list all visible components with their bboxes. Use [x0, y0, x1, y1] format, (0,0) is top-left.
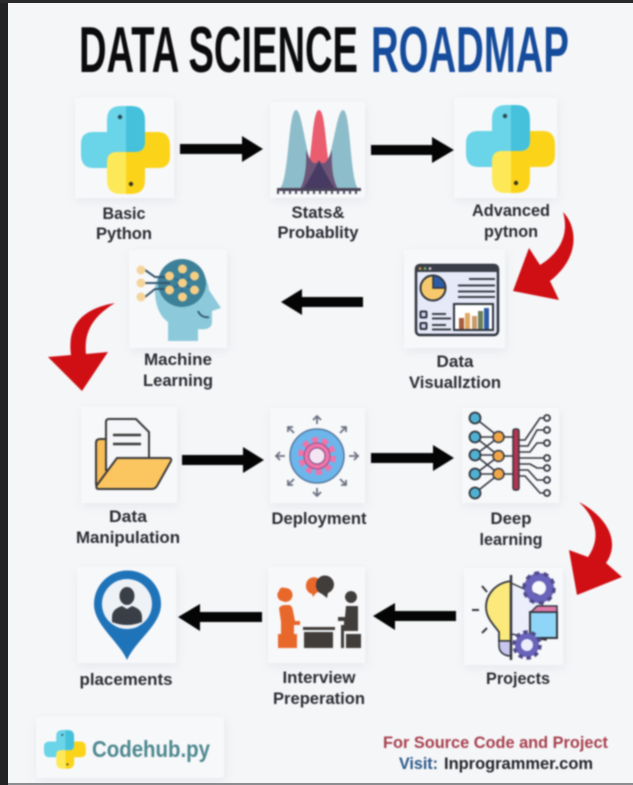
panel: placements	[77, 567, 176, 689]
call to action	[383, 733, 608, 773]
panel: Data Visuallztion	[404, 250, 505, 392]
label: Machine	[144, 350, 212, 369]
arrow: stats to advanced python	[371, 137, 454, 163]
label	[409, 352, 501, 392]
icon: folder with document	[96, 419, 171, 489]
card	[77, 567, 176, 663]
panel: Codehub.py logo	[36, 717, 224, 778]
panel: Stats and Probablity	[270, 102, 365, 242]
label: Python	[96, 224, 152, 243]
panel: Deployment	[270, 408, 367, 528]
icon: python logo	[81, 106, 170, 194]
arrow: projects to interview preperation	[373, 603, 456, 630]
label: Visuallztion	[409, 373, 501, 392]
label: Stats&	[292, 203, 344, 222]
card	[464, 568, 563, 665]
card	[462, 408, 559, 503]
call to action: Inprogrammer.com	[444, 754, 593, 773]
red curved arrow: machine learning to data manipulation	[48, 303, 115, 391]
arrow: interview preperation to placements	[178, 604, 262, 631]
icon: head with neural network	[136, 259, 221, 341]
card	[270, 408, 365, 503]
label: Deployment	[272, 509, 367, 528]
label: Advanced	[472, 201, 550, 220]
arrow: data visualization to machine learning	[281, 289, 363, 315]
red curved arrow: deep learning to projects	[569, 502, 622, 595]
label	[143, 350, 213, 390]
label	[96, 204, 152, 243]
label	[472, 201, 550, 241]
label: Data	[109, 507, 148, 526]
label: Interview	[282, 668, 356, 687]
card	[36, 717, 224, 778]
icon: dashboard window	[416, 265, 498, 335]
label: Manipulation	[76, 528, 180, 547]
icon: python logo	[466, 105, 555, 193]
label: placements	[80, 670, 172, 689]
card	[75, 98, 174, 198]
icon: interview scene	[277, 576, 361, 648]
label: Basic	[102, 204, 146, 223]
call to action: For Source Code and Project	[383, 733, 608, 752]
left dark edge	[0, 0, 8, 785]
label: Preperation	[273, 689, 365, 708]
icon: map pin with person	[94, 570, 161, 660]
label: Learning	[143, 371, 213, 390]
panel: Advanced pytnon	[454, 98, 557, 241]
interviewer	[338, 591, 361, 648]
label: Probablity	[278, 223, 359, 242]
interviewee	[277, 587, 300, 648]
label	[480, 509, 542, 549]
label: Deep	[490, 509, 532, 528]
panel: Projects	[464, 568, 563, 688]
panel: Machine Learning	[129, 250, 227, 390]
icon: bulb, gears and cube	[472, 573, 557, 660]
label: Data	[436, 352, 474, 371]
card	[129, 250, 227, 348]
table	[303, 627, 335, 648]
speech bubbles	[306, 576, 334, 598]
card	[404, 250, 505, 348]
card	[270, 102, 365, 198]
card	[81, 407, 177, 503]
panel: Data Manipulation	[76, 407, 180, 547]
label: pytnon	[484, 222, 538, 241]
icon: python logo	[44, 730, 86, 769]
icon: bell curves	[277, 110, 361, 194]
label	[273, 668, 365, 708]
panel: Deep learning	[462, 408, 559, 549]
arrow: data manipulation to deployment	[182, 447, 264, 473]
panel: Interview Preperation	[268, 567, 365, 708]
label: Projects	[486, 669, 550, 688]
card	[268, 567, 365, 663]
card	[454, 98, 557, 198]
label	[76, 507, 180, 547]
title: DATA SCIENCE	[79, 13, 358, 86]
icon: gear with outward arrows	[276, 416, 358, 496]
arrow: python to stats	[180, 136, 263, 162]
label: learning	[480, 530, 542, 549]
top dark edge	[0, 0, 633, 3]
brand name: Codehub.py	[92, 736, 210, 762]
arrow: deployment to deep learning	[371, 445, 454, 471]
call to action: Visit:	[399, 754, 438, 773]
panel: Basic Python	[75, 98, 174, 243]
bottom edge	[8, 783, 633, 785]
red curved arrow: advanced python to data visualization	[513, 212, 574, 300]
icon: neural network	[470, 412, 550, 498]
label	[278, 203, 359, 242]
